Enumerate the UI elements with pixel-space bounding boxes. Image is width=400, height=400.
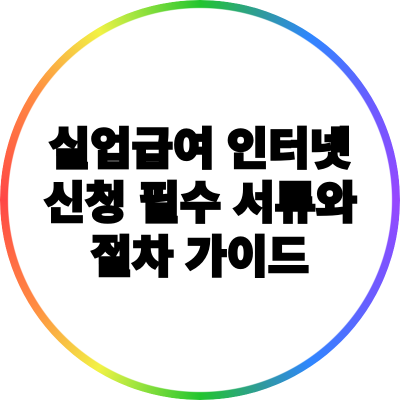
title line 3: 절차 가이드: [91, 233, 309, 282]
title line 1: 실업급여 인터넷: [49, 125, 351, 174]
title line 2: 신청 필수 서류와: [44, 179, 357, 228]
